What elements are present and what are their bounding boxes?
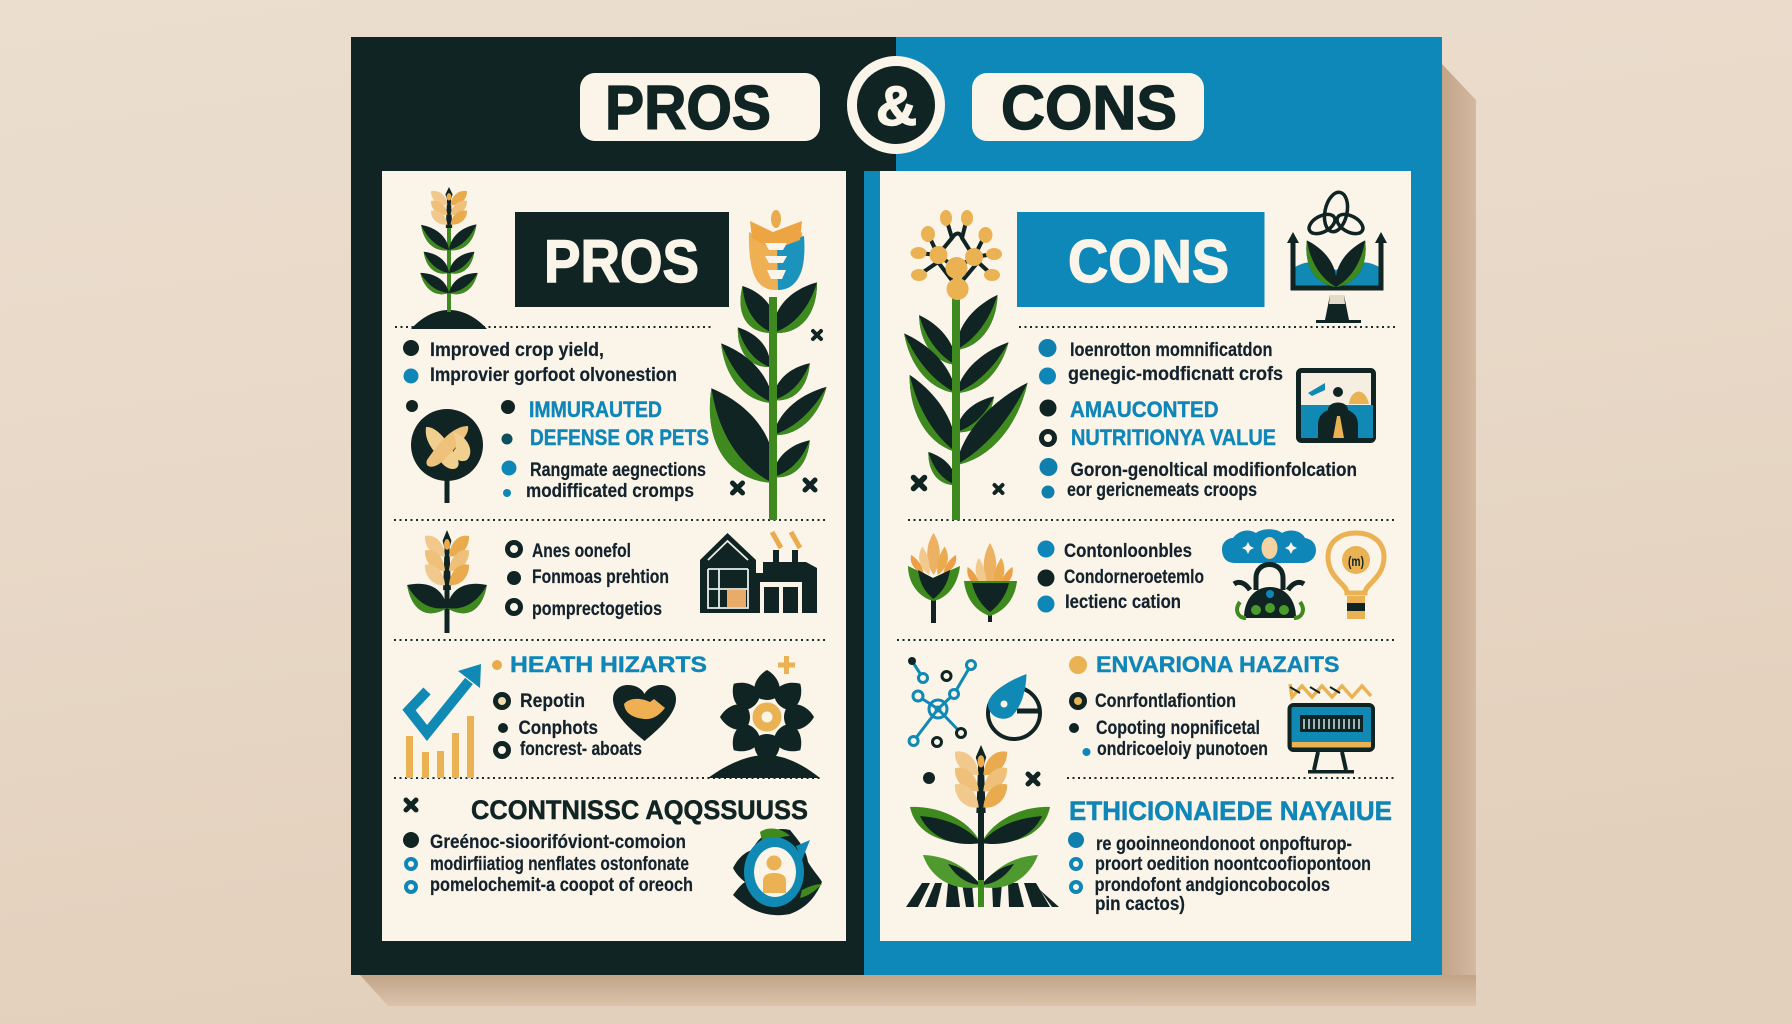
list: consensus <box>403 832 693 896</box>
icon: chain over plant frame <box>1287 190 1387 323</box>
outer panel <box>351 37 1442 975</box>
icon: small plant on mound <box>411 187 487 329</box>
title pill: cons: CONS <box>1001 74 1177 143</box>
heading: consensus: CCONTNISSC AQQSSUUSS <box>471 795 808 825</box>
heading: health hazards: HEATH HIZARTS <box>510 652 707 677</box>
icon: tall plant with flower <box>689 210 835 520</box>
list: environmental: Copoting nopnificetal <box>1096 718 1260 739</box>
list: ethical: pin cactos) <box>1095 894 1185 915</box>
icon: molecule network <box>908 657 976 746</box>
heading: pros: PROS <box>544 228 699 295</box>
list: ethical: re gooinneondonoot onpofturop- <box>1096 834 1352 855</box>
heading: environmental hazards: ENVARIONA HAZAITS <box>1096 652 1340 677</box>
list: controversies <box>1038 540 1204 613</box>
list: genetic modification: eor gericnemeats croops <box>1067 480 1257 501</box>
list: consensus: Greénoc-sioorifóviont-comoion <box>430 832 686 853</box>
icon: two wheat cups <box>908 533 1017 623</box>
heading: cons <box>1017 212 1264 307</box>
list: consensus: pomelochemit-a coopot of oreoch <box>430 875 693 896</box>
icon: picture of person <box>1298 370 1374 440</box>
list: genetic modification: Ioenrotton momnificatdon <box>1070 340 1272 361</box>
icon: tall plant with cluster flower <box>894 210 1040 520</box>
list: genetic modification: Goron-genoltical modifionfolcation <box>1070 460 1357 481</box>
heading: pros <box>515 212 729 307</box>
list: farm protection: pomprectogetios <box>532 599 662 620</box>
heading: ethical: ETHICIONAIEDE NAYAIUE <box>1069 796 1392 826</box>
list: controversies: Contonloonbles <box>1064 541 1192 562</box>
list: defense: DEFENSE OR PETS <box>530 425 709 450</box>
icon: barn and factory <box>700 532 817 613</box>
icon: x mark <box>406 800 416 810</box>
list: crop yield: Improvier gorfoot olvonestion <box>430 365 677 386</box>
list: genetic modification: genegic-modficnatt crofs <box>1068 364 1283 385</box>
list: defense: Rangmate aegnections <box>530 460 706 481</box>
icon: sun flower on mound <box>708 670 820 778</box>
list: ethical <box>1068 832 1371 915</box>
list: ethical: prondofont andgioncobocolos <box>1095 875 1330 896</box>
list: health: Repotin <box>520 691 585 712</box>
title band <box>580 56 1204 154</box>
title pill: pros: PROS <box>605 74 771 143</box>
list: defense: IMMURAUTED <box>529 397 662 422</box>
list: farm protection <box>507 541 669 620</box>
icon: gold plus <box>778 656 795 674</box>
list: health: Conphots <box>518 718 598 739</box>
list: environmental <box>1069 691 1268 760</box>
icon: leafy plant on furrows <box>906 745 1059 907</box>
list: controversies: Condorneroetemlo <box>1064 567 1204 588</box>
icon: monitor <box>1290 684 1373 774</box>
list: genetic modification: AMAUCONTED <box>1070 397 1219 422</box>
panel: pros <box>382 171 846 941</box>
list: controversies: Iectienc cation <box>1065 592 1181 613</box>
list: farm protection: Fonmoas prehtion <box>532 567 669 588</box>
list: crop yield <box>403 340 677 386</box>
panel shadow right <box>1442 64 1476 1006</box>
icon: check arrow and bars <box>406 664 481 778</box>
icon: heart with hand <box>613 685 676 741</box>
ampersand badge <box>847 56 945 154</box>
icon: light bulb <box>1328 533 1384 619</box>
list: health <box>496 691 642 760</box>
icon: person in leaf ring <box>733 829 822 915</box>
list: ethical: proort oedition noontcoofiopontoon <box>1095 854 1371 875</box>
icon: cloud over lock <box>1222 529 1316 618</box>
ampersand badge: & <box>876 74 917 137</box>
panel shadow bottom <box>360 975 1476 1006</box>
icon: seed badge <box>406 400 483 503</box>
list: environmental: ondricoeloiy punotoen <box>1097 739 1268 760</box>
list: health: foncrest- aboats <box>520 739 642 760</box>
list: defense <box>501 397 709 502</box>
icon: water drop gauge <box>988 674 1040 739</box>
list: genetic modification: NUTRITIONYA VALUE <box>1071 425 1276 450</box>
icon: light bulb: (m) <box>1348 553 1364 569</box>
list: crop yield: Improved crop yield, <box>430 340 604 361</box>
icon: wheat <box>400 530 494 633</box>
panel: cons <box>880 171 1411 941</box>
list: environmental: Conrfontlafiontion <box>1095 691 1236 712</box>
list: genetic modification <box>1038 339 1357 501</box>
list: farm protection: Anes oonefol <box>532 541 631 562</box>
list: consensus: modirfiiatiog nenflates ostonfonate <box>430 854 689 875</box>
list: defense: modifficated cromps <box>526 481 694 502</box>
heading: cons: CONS <box>1068 228 1229 295</box>
